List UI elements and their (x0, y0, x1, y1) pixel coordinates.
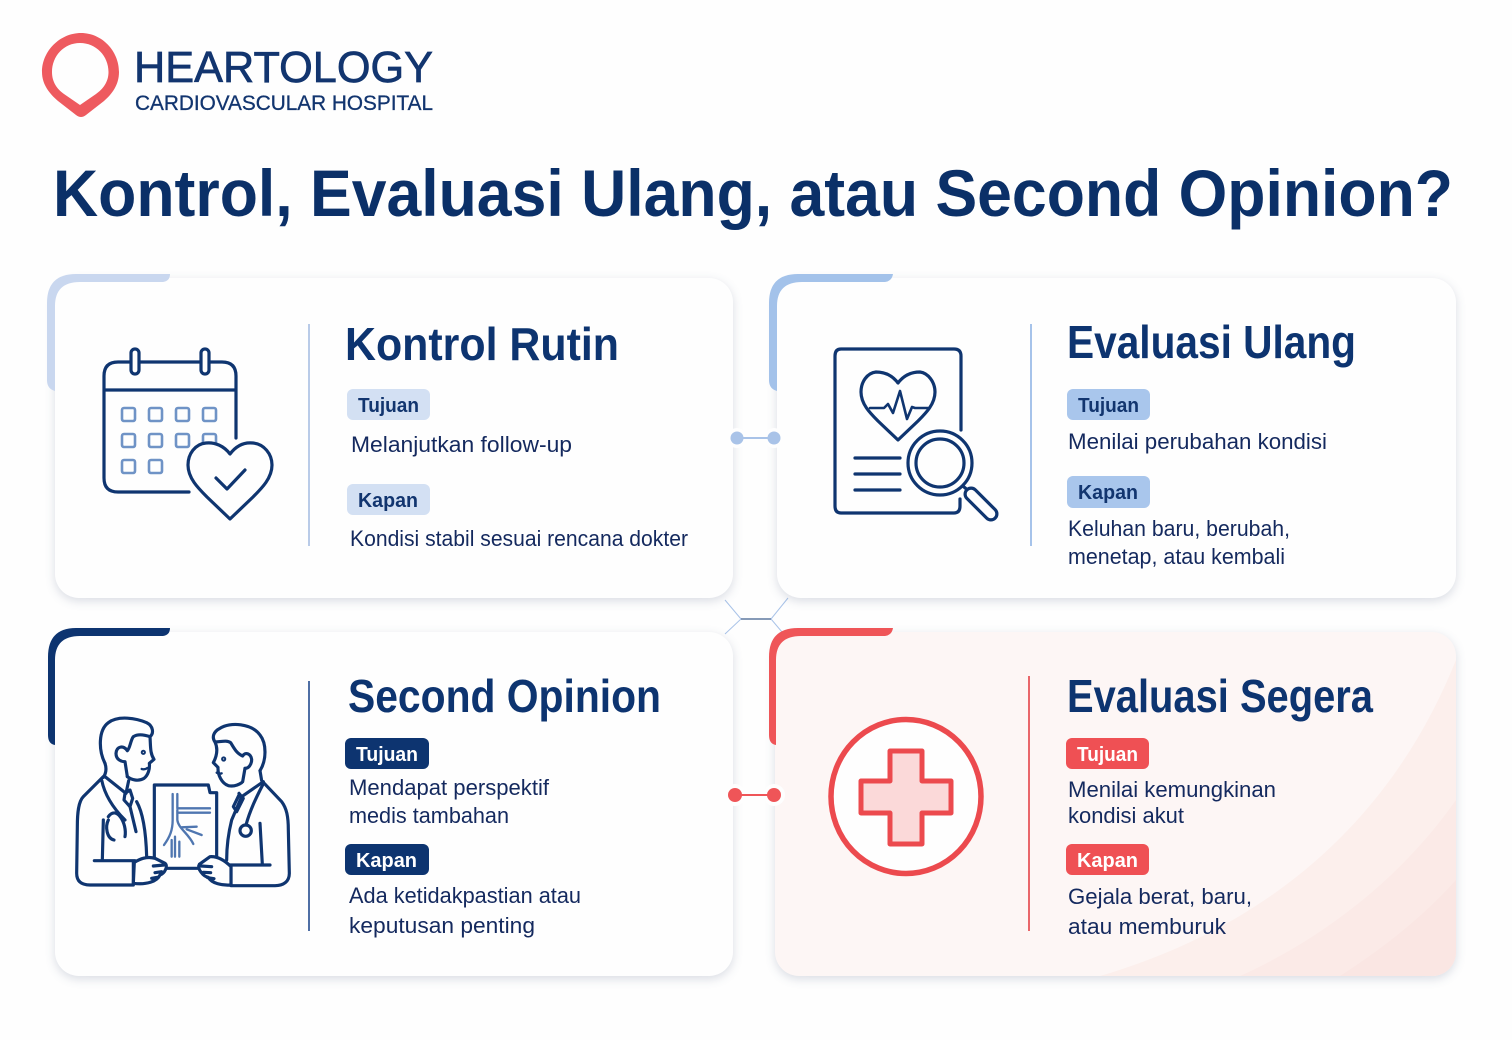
panel: Evaluasi Ulang (769, 274, 1456, 598)
badge: Tujuan: Tujuan (1077, 744, 1138, 766)
text: kapan: Keluhan baru, berubah, (1068, 516, 1290, 541)
title: Kontrol, Evaluasi Ulang, atau Second Opinion? (53, 156, 1453, 230)
card background (775, 632, 1456, 976)
heading: Second Opinion (348, 670, 661, 722)
right hand (199, 857, 231, 885)
accent corner (769, 274, 893, 391)
text: tujuan (349, 775, 550, 828)
badge: Kapan (1067, 476, 1150, 508)
badge: Kapan (1066, 844, 1149, 875)
card background (55, 278, 733, 598)
logo name: HEARTOLOGY (134, 43, 433, 92)
badge: Kapan (347, 484, 430, 515)
accent corner (48, 628, 170, 745)
text: tujuan: Menilai kemungkinan (1068, 777, 1276, 802)
badge: Kapan: Kapan (356, 850, 417, 872)
heading: Evaluasi Segera (1067, 670, 1373, 722)
text: kapan: Gejala berat, baru, (1068, 884, 1252, 909)
logo mark: teardrop ring (42, 33, 119, 117)
badge: Kapan: Kapan (1078, 482, 1138, 504)
text: tujuan: Menilai perubahan kondisi (1068, 429, 1327, 454)
icon: two doctors with scan (77, 718, 289, 886)
divider (1030, 324, 1032, 546)
badge: Tujuan (347, 389, 430, 420)
badge: Tujuan (1067, 389, 1150, 420)
divider (308, 324, 310, 546)
badge: Kapan (345, 844, 429, 875)
right doctor (213, 724, 289, 886)
badge: Tujuan (1066, 738, 1149, 769)
left doctor (77, 718, 154, 885)
text: tujuan (1068, 777, 1276, 828)
divider (308, 681, 310, 931)
icon: medical report with magnifier (835, 349, 999, 522)
text: tujuan: Mendapat perspektif (349, 775, 550, 800)
text: kapan (1068, 884, 1252, 939)
left hand (133, 858, 166, 884)
card background (777, 278, 1456, 598)
badge: Tujuan: Tujuan (358, 395, 419, 417)
panel: Kontrol Rutin (47, 274, 733, 598)
text: tujuan: medis tambahan (349, 803, 509, 828)
divider (1028, 676, 1030, 931)
badge: Tujuan: Tujuan (356, 744, 418, 766)
decorative hexagon link between cards (725, 598, 788, 634)
badge: Kapan: Kapan (1077, 850, 1138, 872)
accent corner (769, 628, 893, 745)
heading: Kontrol Rutin (345, 318, 619, 370)
accent corner (47, 274, 170, 391)
text: kapan: menetap, atau kembali (1068, 544, 1285, 569)
connector: top cards (727, 428, 784, 448)
text: kapan (349, 883, 581, 938)
text: kapan: atau memburuk (1068, 914, 1227, 939)
text: tujuan: kondisi akut (1068, 803, 1184, 828)
text: kapan: keputusan penting (349, 913, 535, 938)
badge: Tujuan (345, 738, 429, 769)
logo subtitle: CARDIOVASCULAR HOSPITAL (135, 92, 433, 115)
panel: Evaluasi Segera (769, 628, 1456, 976)
text: tujuan: Melanjutkan follow-up (351, 432, 572, 457)
text: kapan: Kondisi stabil sesuai rencana dokter (350, 526, 688, 551)
card background (55, 632, 733, 976)
panel: Second Opinion (48, 628, 733, 976)
text: kapan (1068, 516, 1290, 569)
background swooshes (1100, 660, 1456, 976)
badge: Kapan: Kapan (358, 490, 418, 512)
icon: calendar with heart (104, 349, 272, 519)
connector: bottom cards (724, 784, 785, 806)
text: kapan: Ada ketidakpastian atau (349, 883, 581, 908)
icon: red cross in circle (831, 720, 981, 874)
badge: Tujuan: Tujuan (1078, 395, 1139, 417)
heading: Evaluasi Ulang (1067, 316, 1356, 368)
logo (42, 33, 433, 117)
scan document (154, 785, 217, 868)
